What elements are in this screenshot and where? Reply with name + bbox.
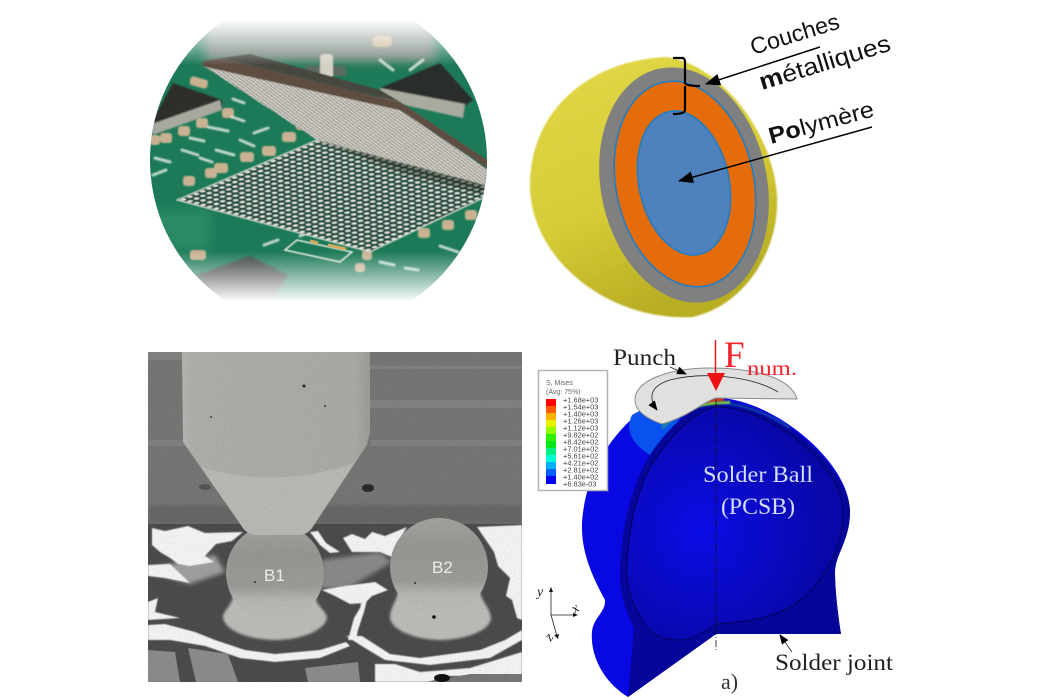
legend colour bar	[546, 399, 556, 484]
stress legend: S, Mises	[546, 380, 573, 387]
symmetry axis	[715, 400, 717, 652]
legend values: +1.12e+03	[563, 424, 598, 432]
arrow to polymer	[679, 127, 872, 181]
stress legend	[538, 370, 608, 490]
model outer body	[582, 398, 850, 697]
label: a): a)	[721, 669, 738, 694]
grey smudges	[320, 552, 392, 590]
ball B1	[223, 524, 327, 640]
legend values: +7.01e+02	[563, 444, 598, 454]
axis triad	[535, 585, 583, 645]
chip substrate edge	[202, 58, 490, 170]
red force arrow	[707, 340, 725, 391]
axis triad: x	[568, 601, 583, 617]
lighter stress patch	[629, 405, 680, 458]
shadow under lifted chip	[317, 136, 485, 194]
board trace box	[285, 240, 352, 262]
legend values: +1.26e+03	[563, 416, 598, 426]
label: B1: B1	[264, 566, 285, 585]
legend values: +1.40e+03	[563, 410, 598, 418]
label: Punch: Punch	[613, 345, 677, 370]
legend values	[563, 396, 598, 488]
axis triad: z	[541, 630, 557, 645]
lower ball grid pad array	[177, 140, 490, 252]
stress legend: (Avg: 75%)	[546, 389, 580, 396]
vertical trace	[348, 601, 368, 641]
stress band	[662, 399, 790, 428]
section face	[620, 400, 850, 697]
circuit board background	[150, 26, 487, 300]
grey metallic layer	[578, 51, 790, 319]
legend values: +8.42e+02	[563, 438, 598, 446]
axis triad: y	[535, 585, 544, 600]
legend values: +9.82e+02	[563, 430, 598, 440]
orange layer	[596, 68, 774, 300]
legend values: +1.54e+03	[563, 402, 598, 412]
label: métalliques: métalliques	[756, 30, 894, 96]
right fine wiring band	[346, 630, 522, 665]
legend values: +1.40e+02	[563, 472, 598, 482]
panel: layered sphere diagram	[530, 8, 894, 319]
label: Solder Ball: Solder Ball	[703, 462, 813, 487]
legend values: +5.61e+02	[563, 452, 598, 460]
punch	[635, 368, 797, 424]
lower board background	[148, 524, 522, 682]
holes	[362, 484, 374, 492]
bracket	[673, 58, 700, 114]
punch leader arrow	[670, 367, 686, 374]
arrow to metallic layers	[706, 47, 820, 84]
upper substrate background	[148, 352, 522, 530]
bottom pads	[148, 648, 522, 682]
left chip	[150, 83, 222, 135]
silkscreen marks	[153, 60, 483, 270]
capacitor cylinder	[306, 54, 346, 78]
bottom chip	[198, 255, 288, 296]
label: PCSB: (PCSB)	[721, 494, 795, 519]
label: F num.: F	[724, 335, 745, 376]
label: Polymère: Polymère	[766, 96, 877, 149]
label: Couches: Couches	[747, 8, 842, 60]
polymer core	[625, 102, 743, 264]
legend values: +1.68e+03	[563, 396, 598, 404]
left fine wiring band	[148, 624, 350, 662]
white metal patches	[148, 525, 522, 682]
punch inner curved arrow	[652, 376, 778, 410]
legend values: +4.21e+02	[563, 458, 598, 468]
ball B2	[390, 518, 491, 640]
solder components	[150, 36, 477, 272]
label: subscript num.: num.	[747, 358, 797, 380]
sphere outer gold layer	[530, 57, 777, 317]
solder joint leader arrow	[780, 635, 792, 652]
panel: PCB photo in fading circle	[150, 22, 487, 300]
bottom right white field	[375, 652, 522, 682]
lifted chip ball array	[202, 65, 487, 185]
probe tool	[182, 352, 370, 535]
label: Solder joint: Solder joint	[775, 650, 894, 675]
label: B2: B2	[432, 558, 453, 577]
panel: SEM micrograph	[148, 352, 522, 682]
grain noise	[148, 352, 522, 682]
panel: finite element model	[535, 335, 894, 697]
right chip	[380, 63, 473, 118]
legend values: +2.81e+02	[563, 466, 598, 474]
ball section inner	[627, 407, 843, 640]
legend values: +6.83e-03	[563, 480, 596, 488]
